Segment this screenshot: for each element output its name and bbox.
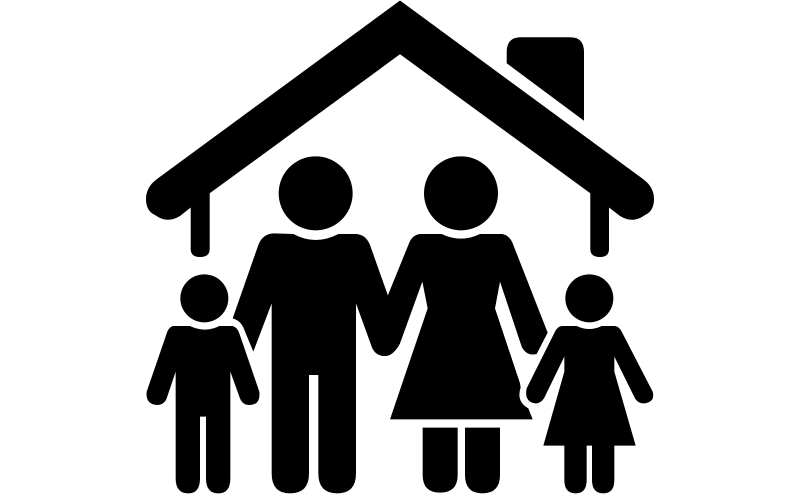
icon: chimney [507, 37, 584, 121]
icon: house roof with posts [146, 0, 654, 257]
woman legs [423, 428, 458, 493]
icon: man [233, 156, 400, 493]
icon: boy [147, 274, 259, 493]
icon: girl [526, 274, 653, 493]
icon: woman [382, 156, 548, 493]
